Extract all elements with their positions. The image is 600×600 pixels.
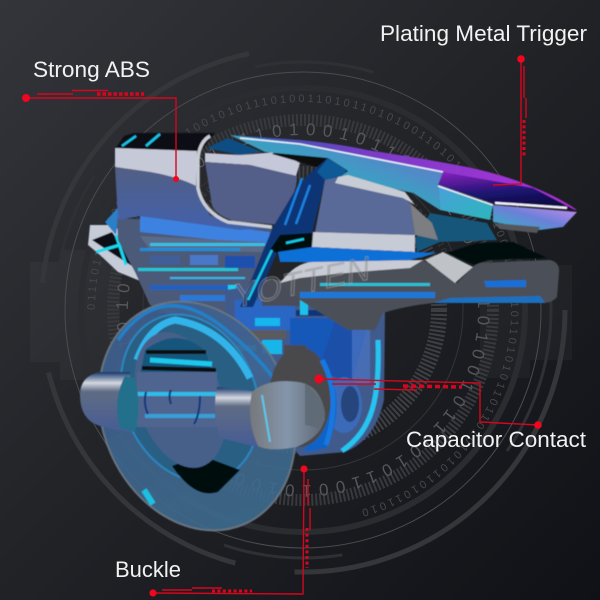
lower cyan accents	[144, 490, 153, 504]
white metal strip	[425, 252, 473, 283]
cyan details on rear top	[122, 134, 160, 146]
rear white panel	[115, 148, 197, 186]
cap shade	[305, 383, 325, 428]
dark purple section	[438, 172, 577, 211]
dark contact disc	[269, 347, 331, 447]
circular tech rings backdrop	[30, 48, 572, 572]
blue band under white band	[278, 247, 437, 264]
top magenta edge	[230, 135, 577, 210]
white band above right window	[335, 175, 415, 205]
lower trigger lever	[280, 260, 559, 330]
callout: Buckle	[115, 465, 310, 597]
leader line	[493, 60, 526, 185]
cap reflections	[262, 395, 270, 442]
hole inner top stripes	[140, 338, 216, 385]
trigger device illustration	[63, 133, 577, 562]
blue sleeve of left rod	[117, 376, 138, 432]
label: Plating Metal Trigger: Plating Metal Trigger	[380, 21, 587, 46]
left rod	[80, 372, 132, 433]
outer translucent ring	[63, 270, 331, 562]
teal blue trigger shoulder	[207, 138, 262, 155]
second window	[205, 162, 297, 225]
watermark: YOTTEN	[234, 250, 372, 316]
black strip on shoulder	[272, 150, 328, 168]
white window outline	[198, 136, 272, 227]
ring hole	[118, 320, 242, 480]
middle machine body	[117, 216, 272, 345]
black band behind lever	[447, 242, 547, 265]
end dot	[517, 55, 525, 63]
right window	[315, 177, 415, 235]
blocky texture band	[30, 248, 572, 380]
white highlight on middle panel	[438, 186, 493, 205]
binary text rings: 110010100101101001011001010010110100101100101100101001011010100101100101	[148, 187, 446, 308]
rear grey-blue face	[115, 167, 270, 230]
second white panel	[205, 152, 300, 176]
teal top panel	[230, 135, 443, 210]
buckle ring assembly	[63, 270, 331, 562]
blue rim	[322, 360, 333, 445]
left cyan and white fragments	[88, 205, 150, 285]
callout: Plating Metal Trigger	[380, 21, 587, 185]
leader line	[319, 379, 538, 425]
label: Capacitor Contact: Capacitor Contact	[406, 427, 586, 452]
label: Strong ABS: Strong ABS	[33, 57, 150, 82]
tip underside	[493, 223, 540, 233]
contact button	[250, 347, 333, 449]
upper cyan rim of outer ring	[118, 306, 276, 382]
end dots	[22, 94, 179, 182]
leader line	[153, 469, 310, 594]
callout: Strong ABS	[22, 57, 179, 182]
ring hole black gap	[172, 455, 240, 494]
leader line	[26, 90, 176, 179]
metal cap	[250, 381, 325, 449]
white highlight line	[240, 138, 443, 172]
inner thick ring	[97, 294, 283, 502]
inner shaft	[137, 372, 217, 427]
rear top band	[116, 133, 215, 152]
binary text rings: 0111011011000101110101010010101110100110101101010011010110110101001101011011010101101101010101101011010	[87, 94, 518, 516]
end dots	[314, 374, 542, 429]
callout: Capacitor Contact	[314, 374, 586, 452]
tip panel	[493, 205, 577, 230]
grey faceted metal	[410, 203, 438, 240]
middle teal panel	[438, 185, 493, 220]
central dark pillar	[240, 158, 347, 307]
right rod	[215, 387, 258, 447]
lower white band of body	[312, 232, 415, 252]
teal underside	[415, 213, 497, 252]
lower body blocks and cyan shell	[225, 280, 385, 456]
end dots	[149, 465, 308, 597]
tip white highlight	[495, 203, 567, 208]
label: Buckle: Buckle	[115, 557, 181, 582]
